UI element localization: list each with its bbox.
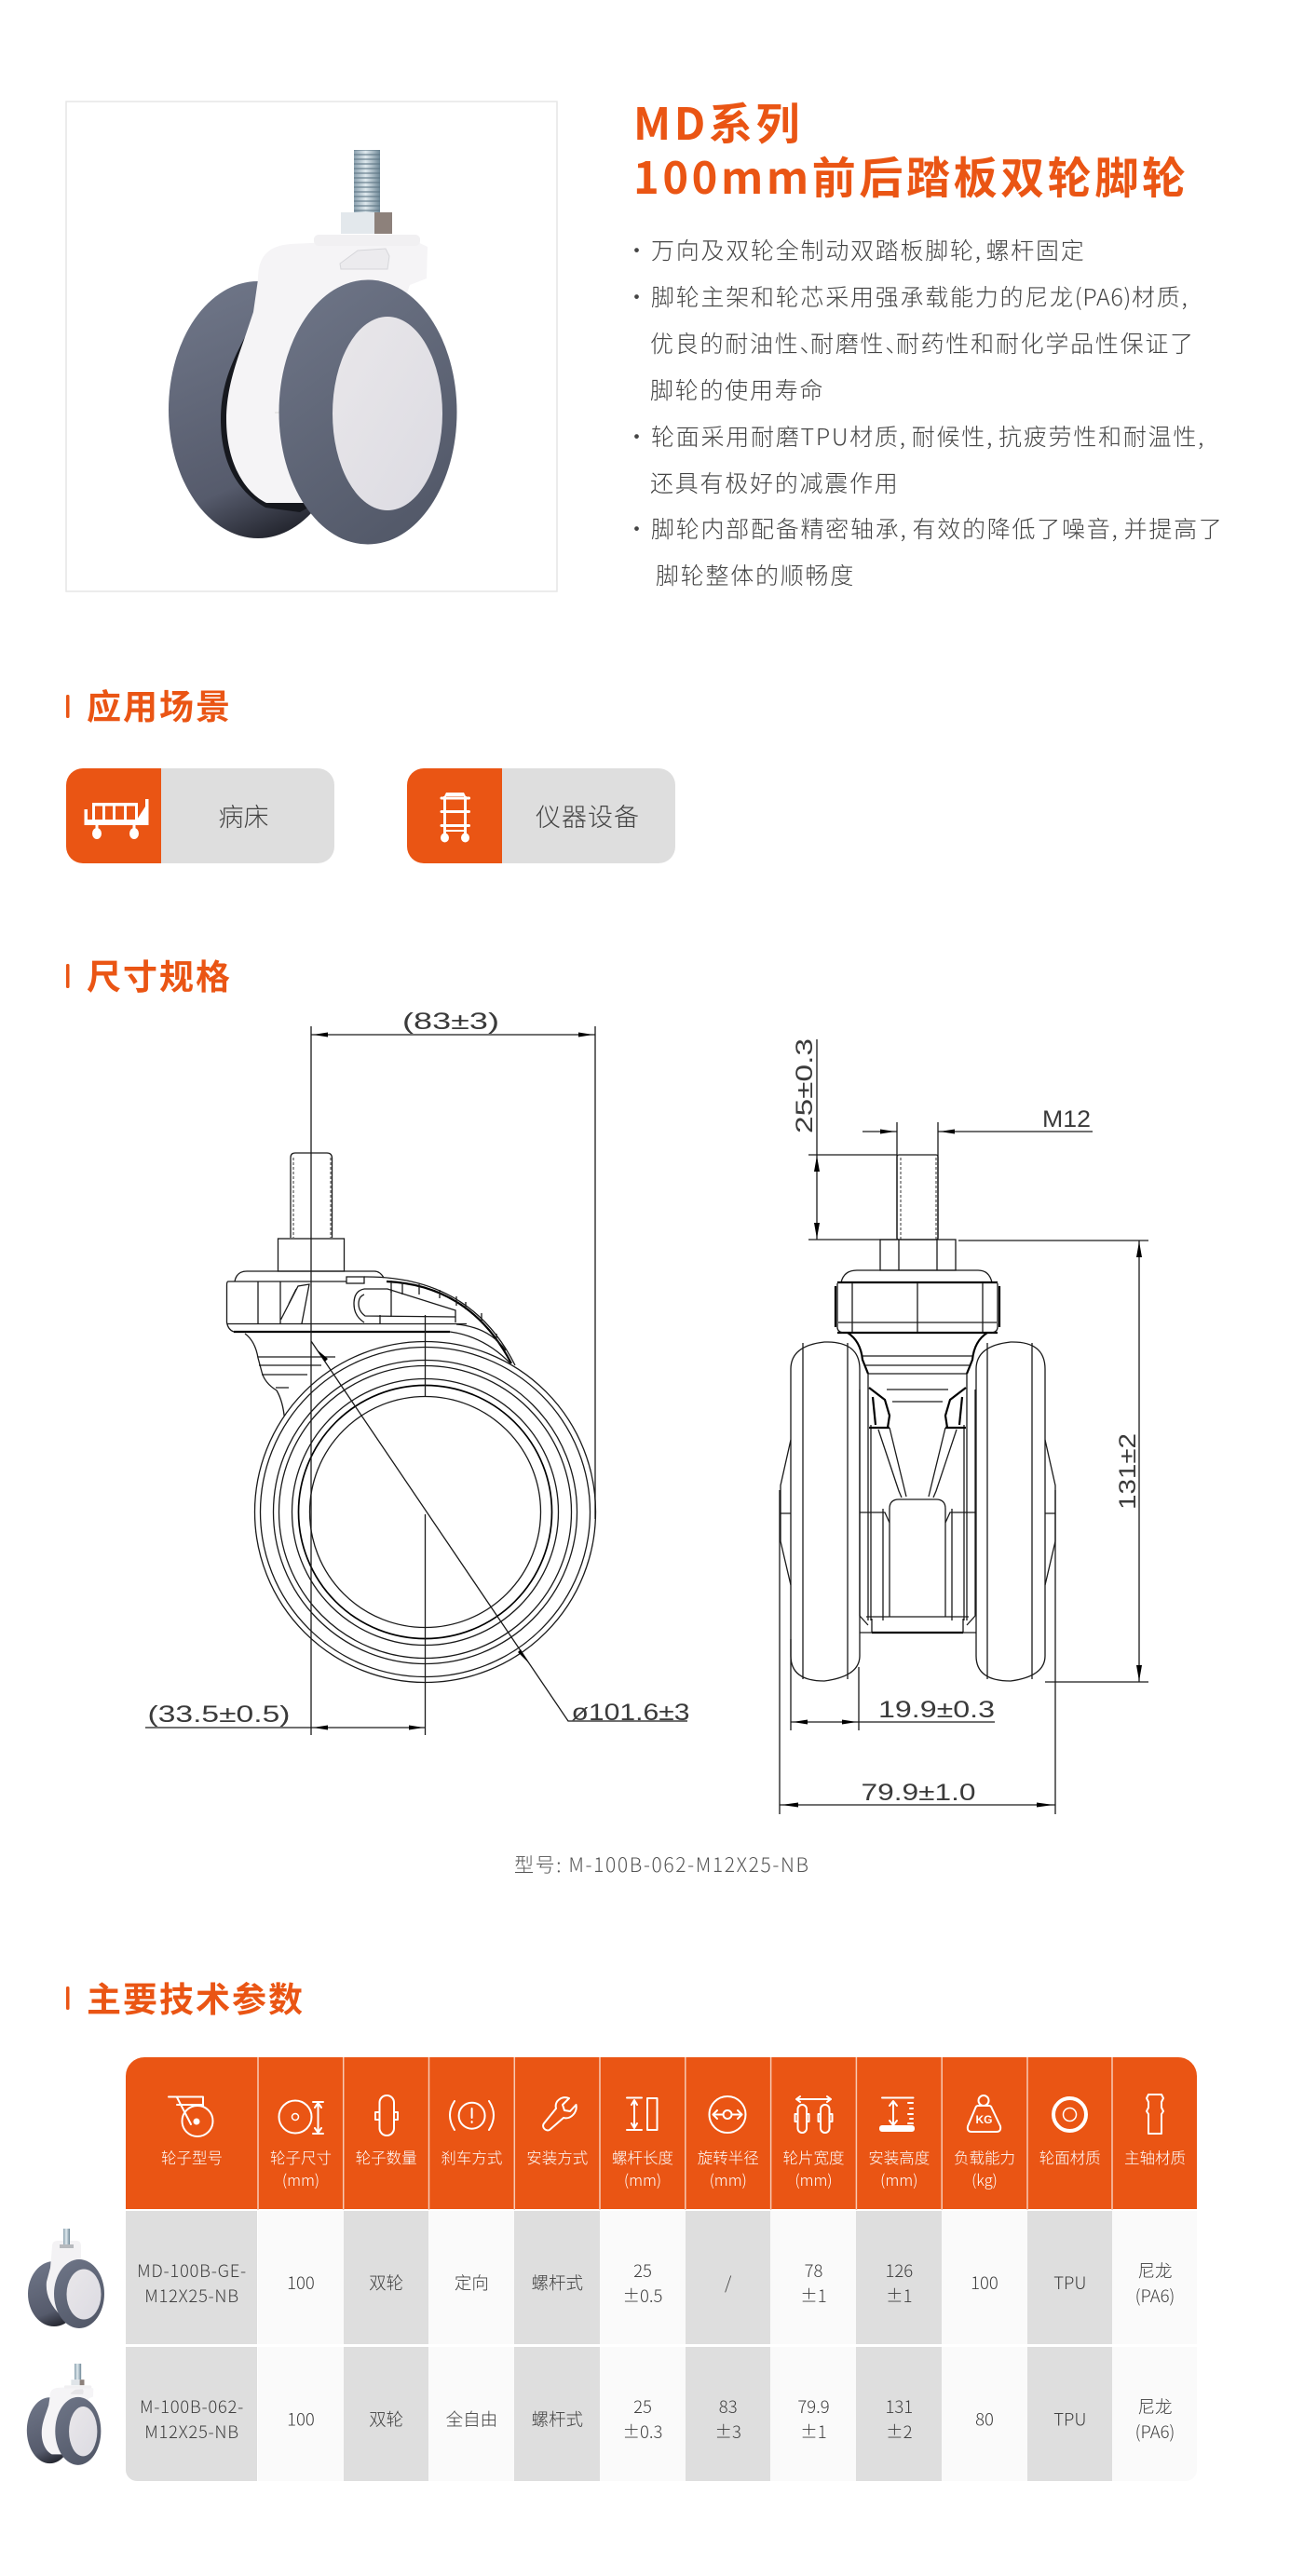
text block: feature bullets: · [625, 279, 650, 313]
table row: M-100B-062: M-100B-062- [140, 2394, 244, 2419]
table row: MD-100B-GE: 25 [633, 2258, 652, 2283]
heading: main technical parameters: 主要技术参数 [87, 1972, 305, 2022]
text block: feature bullets: · [625, 511, 650, 545]
icon: caster [169, 2097, 212, 2136]
label: 安装方式 [526, 2146, 588, 2168]
label: 刹车方式 [441, 2146, 502, 2168]
icon: wheel width [795, 2096, 833, 2133]
text block: feature bullets [625, 233, 1224, 591]
label: 轮子尺寸 [270, 2146, 332, 2168]
table row: MD-100B-GE: 螺杆式 [531, 2271, 583, 2295]
table row: M-100B-062: ±3 [714, 2420, 741, 2444]
label: 轮子数量 [356, 2146, 417, 2168]
table row: M-100B-062: M12X25-NB [144, 2420, 239, 2444]
label: 负载能力 [954, 2146, 1015, 2168]
table row: M-100B-062: TPU [1053, 2407, 1086, 2431]
icon: brake [450, 2101, 494, 2130]
diagram: front view drawing [780, 1038, 1148, 1814]
table row: M-100B-062: ±1 [800, 2420, 827, 2444]
table header [126, 2057, 1197, 2210]
panel: product photo [66, 102, 557, 591]
table row: MD-100B-GE: M12X25-NB [144, 2284, 239, 2308]
text block: feature bullets: 脚轮内部配备精密轴承,有效的降低了噪音,并提高了 [651, 511, 1224, 545]
title [633, 88, 1189, 207]
table row: MD-100B-GE: (PA6) [1135, 2284, 1175, 2308]
icon: stem length [627, 2097, 658, 2130]
icon: instrument cart [440, 793, 470, 842]
table row: MD-100B-GE: 100 [287, 2271, 315, 2295]
text block: feature bullets: 优良的耐油性、耐磨性、耐药性和耐化学品性保证了 [650, 326, 1195, 359]
label: (mm) [282, 2168, 319, 2190]
label: 螺杆长度 [612, 2146, 673, 2168]
front view dimension lines: 19.9±0.3 [878, 1697, 995, 1723]
table row: M-100B-062: ±0.3 [623, 2420, 662, 2444]
caption: model number: 型号: M-100B-062-M12X25-NB [514, 1851, 808, 1878]
text block: feature bullets: 轮面采用耐磨TPU材质,耐候性,抗疲劳性和耐温性, [651, 419, 1205, 453]
table row: MD-100B-GE: 尼龙 [1137, 2258, 1173, 2283]
table row: M-100B-062: (PA6) [1135, 2420, 1175, 2444]
label: (mm) [624, 2168, 661, 2190]
icon: hospital bed [84, 799, 149, 839]
heading: application scenarios: 应用场景 [87, 679, 232, 729]
table row: MD-100B-GE: ±1 [800, 2284, 827, 2308]
icon: install height [880, 2097, 914, 2131]
front view dimension lines [780, 1038, 1148, 1814]
label: (kg) [971, 2168, 998, 2190]
front view dimension lines: 79.9±1.0 [861, 1780, 976, 1806]
front view body outline [781, 1155, 1055, 1681]
photo: caster with threaded stem [169, 150, 456, 544]
icon: load weight: KG [976, 2113, 993, 2126]
side view dimension lines: (83±3) [402, 1009, 499, 1035]
side view dimension lines [145, 1009, 689, 1735]
table row: M-100B-062: 79.9 [797, 2394, 830, 2419]
text block: feature bullets: · [625, 233, 650, 266]
table row: M-100B-062: 83 [719, 2394, 738, 2419]
heading: dimensions: 尺寸规格 [87, 949, 232, 999]
photo: small caster M-100B-062 [27, 2364, 101, 2465]
table row: M-100B-062: 100 [287, 2407, 315, 2431]
label: 轮子型号 [161, 2146, 223, 2168]
front view dimension lines: M12 [1042, 1106, 1091, 1132]
label: hospital bed: 病床 [218, 797, 268, 834]
label: 主轴材质 [1124, 2146, 1186, 2168]
table row: MD-100B-GE: TPU [1053, 2271, 1086, 2295]
side view body outline [227, 1153, 596, 1682]
front view dimension lines: 131±2 [1115, 1433, 1141, 1510]
table row: MD-100B-GE: ±1 [886, 2284, 913, 2308]
icon: wheel size [279, 2101, 323, 2134]
text block: feature bullets: 万向及双轮全制动双踏板脚轮,螺杆固定 [651, 233, 1086, 266]
panel: hospital bed card [66, 768, 334, 863]
icon: wrench [543, 2097, 577, 2130]
icon: tread material [1053, 2098, 1086, 2131]
label: 轮片宽度 [782, 2146, 844, 2168]
label: 安装高度 [868, 2146, 930, 2168]
side view dimension lines: (33.5±0.5) [147, 1702, 291, 1728]
table: technical parameters [126, 2057, 1197, 2481]
text block: feature bullets: 脚轮的使用寿命 [650, 373, 824, 406]
table row: M-100B-062: 全自由 [446, 2407, 497, 2431]
text block: feature bullets: 脚轮主架和轮芯采用强承载能力的尼龙(PA6)材质, [651, 279, 1189, 313]
photo: small caster MD-100B-GE [28, 2229, 104, 2328]
table row: MD-100B-GE: ±0.5 [623, 2284, 662, 2308]
table row: M-100B-062: 131 [885, 2394, 913, 2419]
text block: feature bullets: 还具有极好的减震作用 [650, 466, 900, 499]
text block: feature bullets: · [625, 419, 650, 453]
label: (mm) [710, 2168, 747, 2190]
side view dimension lines: ø101.6±3 [572, 1700, 689, 1726]
table row: M-100B-062 [140, 2394, 1175, 2444]
table row: M-100B-062: ±2 [886, 2420, 913, 2444]
table row: M-100B-062: 双轮 [369, 2407, 403, 2431]
icon: load weight [968, 2095, 1000, 2132]
table row: M-100B-062: 25 [633, 2394, 652, 2419]
panel: instruments card [407, 768, 675, 863]
table row: MD-100B-GE: MD-100B-GE- [137, 2258, 247, 2283]
table row: MD-100B-GE: / [725, 2271, 732, 2295]
label: (mm) [880, 2168, 917, 2190]
table row backgrounds [126, 2211, 1197, 2481]
table row: MD-100B-GE: 100 [971, 2271, 998, 2295]
icon: swivel radius [710, 2096, 745, 2133]
table row: MD-100B-GE: 126 [885, 2258, 913, 2283]
table row: M-100B-062: 80 [975, 2407, 994, 2431]
table row: MD-100B-GE [137, 2258, 1175, 2308]
diagram: side view drawing [145, 1009, 689, 1735]
table row: M-100B-062: 螺杆式 [531, 2407, 583, 2431]
title: MD系列 [633, 88, 803, 153]
label: 轮面材质 [1039, 2146, 1101, 2168]
icon: wheel count [375, 2095, 398, 2135]
table row: M-100B-062: 尼龙 [1137, 2394, 1173, 2419]
icon: spindle [1147, 2095, 1163, 2134]
text block: feature bullets: 脚轮整体的顺畅度 [656, 558, 855, 591]
front view dimension lines: 25±0.3 [792, 1038, 818, 1133]
title: 100mm前后踏板双轮脚轮 [633, 142, 1189, 207]
table row: MD-100B-GE: 定向 [455, 2271, 489, 2295]
table row: MD-100B-GE: 双轮 [369, 2271, 403, 2295]
label: instruments: 仪器设备 [536, 797, 640, 834]
label: (mm) [795, 2168, 833, 2190]
table row: MD-100B-GE: 78 [805, 2258, 822, 2283]
label: 旋转半径 [698, 2146, 759, 2168]
